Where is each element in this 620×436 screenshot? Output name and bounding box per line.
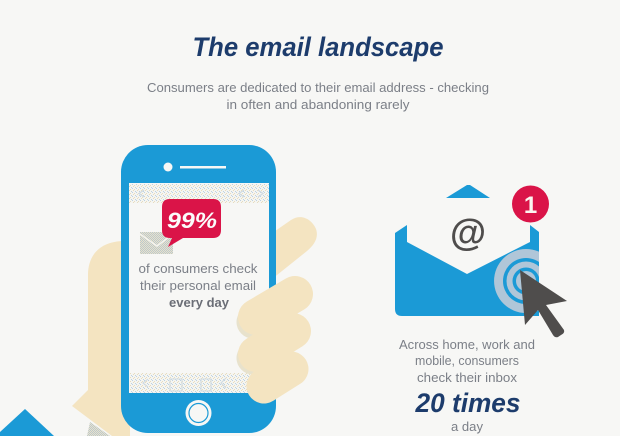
illustration: upper finger behind phone bbox=[268, 217, 317, 279]
text: phone stat: their personal email bbox=[140, 278, 256, 293]
envelope body bbox=[395, 225, 539, 316]
phone screen bbox=[129, 183, 269, 393]
envelope flap tip bbox=[446, 185, 490, 198]
illustration: fingers bbox=[256, 294, 295, 386]
click ripples bbox=[494, 249, 539, 313]
illustration: finger shadows bbox=[253, 316, 262, 358]
phone body bbox=[121, 145, 276, 433]
icon: small envelope bbox=[140, 232, 173, 254]
home button bbox=[186, 400, 212, 426]
at sign: @ bbox=[450, 212, 486, 253]
screen top toolbar bbox=[129, 184, 269, 203]
icon: cursor arrow bbox=[520, 270, 567, 337]
callout: 99% bbox=[162, 199, 221, 247]
illustration: phone bbox=[121, 145, 276, 433]
icon: notification badge: 1 bbox=[524, 192, 537, 219]
text: phone stat: every day bbox=[169, 295, 230, 310]
text: inbox stat: mobile, consumers bbox=[415, 353, 519, 368]
icon: notification badge bbox=[512, 186, 549, 222]
icon: corner blue triangle bbox=[0, 409, 54, 436]
phone speaker and camera bbox=[164, 162, 226, 172]
text: inbox stat: a day bbox=[451, 419, 483, 434]
icon: email envelope bbox=[395, 185, 539, 316]
text: phone stat bbox=[138, 261, 258, 310]
number: 20 times: 20 times bbox=[415, 388, 520, 418]
text: inbox stat bbox=[399, 337, 535, 434]
title: The email landscape bbox=[192, 32, 444, 62]
callout: 99%: 99% bbox=[167, 208, 217, 233]
subtitle: in often and abandoning rarely bbox=[226, 97, 410, 112]
text: inbox stat: check their inbox bbox=[417, 370, 518, 385]
screen bottom toolbar bbox=[130, 373, 269, 393]
illustration: hand palm bbox=[72, 241, 130, 436]
text: inbox stat: Across home, work and bbox=[399, 337, 535, 352]
subtitle bbox=[147, 80, 489, 112]
subtitle: Consumers are dedicated to their email address - checking bbox=[147, 80, 489, 95]
text: phone stat: of consumers check bbox=[138, 261, 258, 276]
